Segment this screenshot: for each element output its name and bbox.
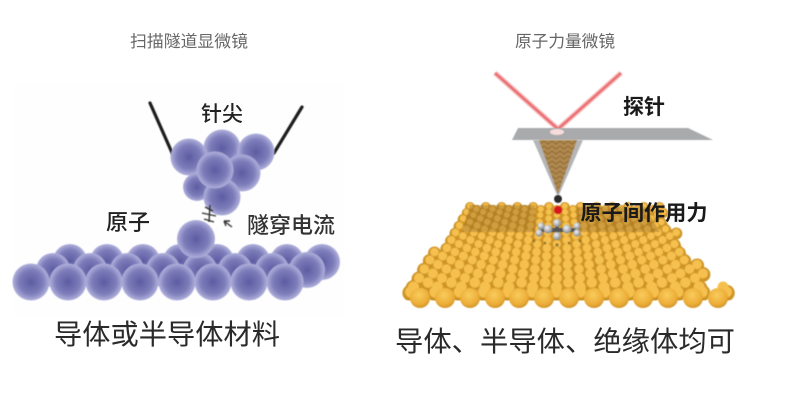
cantilever	[512, 128, 713, 140]
label: interatomic force: 原子间作用力	[580, 202, 708, 225]
probe holder lines	[150, 103, 302, 155]
probe tip	[533, 140, 583, 195]
sample surface atoms	[12, 220, 340, 300]
heading: scanning tunneling microscope: 扫描隧道显微镜	[130, 32, 248, 51]
front row of gold atoms	[410, 288, 728, 308]
label: needle tip: 针尖	[201, 103, 243, 126]
label: probe: 探针	[623, 96, 665, 119]
panel: atomic force microscope diagram	[395, 73, 735, 357]
gold atomic surface	[411, 206, 727, 296]
molecule on surface	[533, 219, 581, 247]
label: atom: 原子	[106, 210, 150, 235]
laser beam	[495, 73, 621, 129]
probe-end atoms	[554, 195, 562, 214]
needle tip atoms	[170, 130, 274, 216]
caption: sample materials: 导体或半导体材料	[54, 319, 280, 350]
panel: scanning tunneling microscope diagram	[12, 82, 344, 350]
caption: applicable samples: 导体、半导体、绝缘体均可	[395, 326, 735, 357]
label: tunnelling current: 隧穿电流	[247, 213, 335, 238]
shadowed surface areas	[462, 205, 660, 232]
tunnelling current sparks	[202, 205, 232, 227]
heading: atomic force microscope: 原子力量微镜	[515, 32, 615, 51]
